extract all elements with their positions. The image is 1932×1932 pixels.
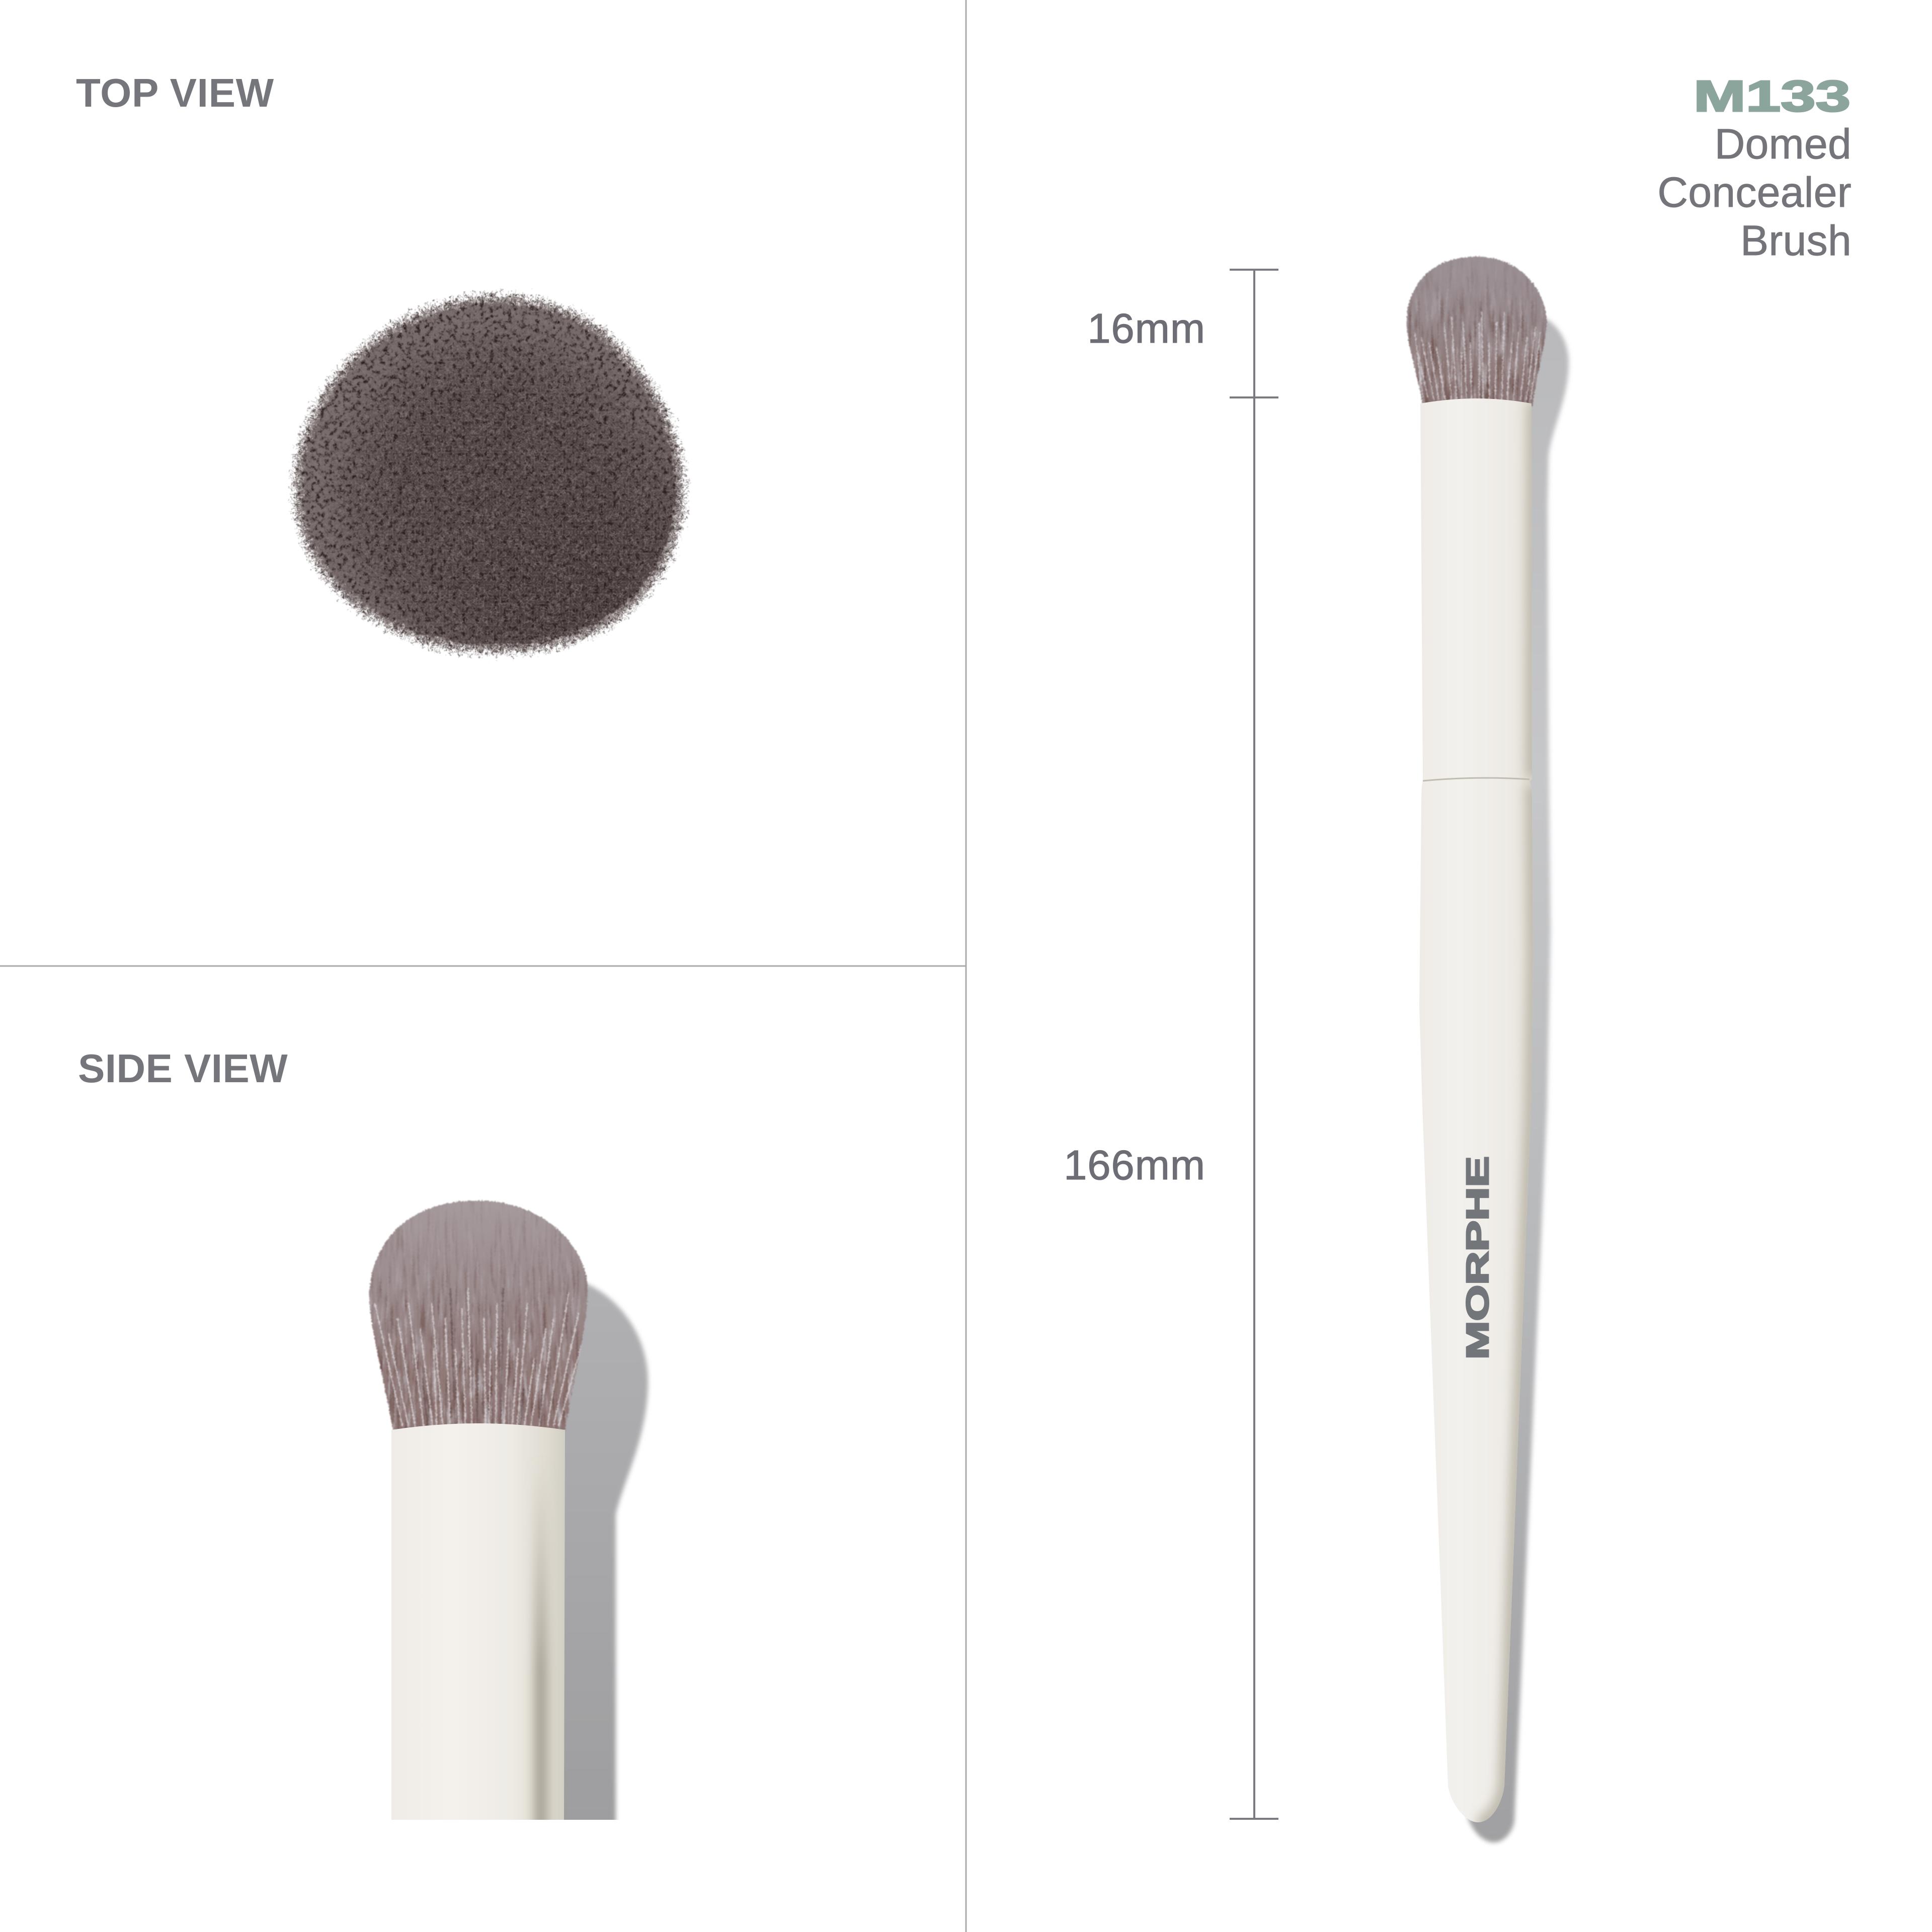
panel dividers <box>0 0 966 1932</box>
full brush body <box>1419 398 1533 1822</box>
side view shadow <box>564 1281 651 1820</box>
panel: full brush <box>1064 72 1852 1842</box>
heading: top view: TOP VIEW <box>76 70 274 115</box>
brush name line 3: Brush <box>1740 217 1852 264</box>
brush name line 2: Concealer <box>1657 169 1852 216</box>
model number: M133 <box>1694 72 1850 121</box>
dimension label: 16mm: 16mm <box>1087 305 1205 352</box>
brush title block <box>1657 72 1852 264</box>
side view bristles <box>362 1197 594 1434</box>
panel: side view <box>78 1046 648 1831</box>
full brush shadow <box>1468 314 1569 1842</box>
full brush bristles <box>1406 255 1548 407</box>
dimension line <box>1230 270 1278 1819</box>
brush name line 1: Domed <box>1715 120 1852 168</box>
panel: top view <box>76 70 677 646</box>
brush head seen from above <box>301 302 677 646</box>
dimension label: 166mm: 166mm <box>1064 1142 1205 1188</box>
heading: side view: SIDE VIEW <box>78 1046 288 1091</box>
brand mark on handle: MORPHE <box>1461 1156 1495 1359</box>
side view ferrule <box>387 1414 569 1831</box>
